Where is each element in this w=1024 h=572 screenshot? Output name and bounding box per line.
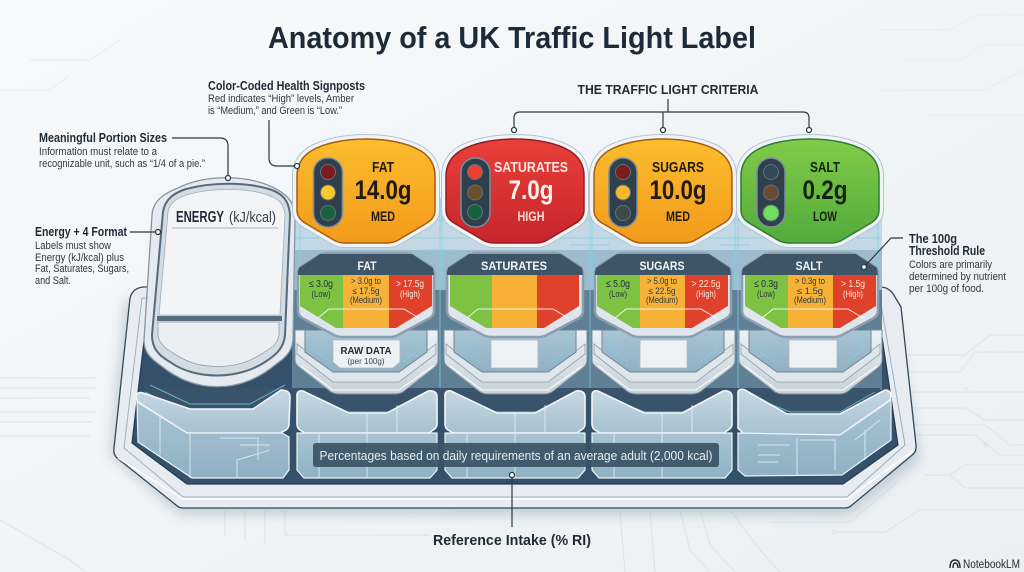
heading and bracket: the traffic light criteria bbox=[512, 82, 812, 132]
salt stack bbox=[739, 330, 882, 394]
callout: energy + 4 format: and Salt. bbox=[35, 275, 71, 287]
traffic light card: salt, low: SALT bbox=[810, 159, 840, 176]
callout: color-coded health signposts: is “Medium,” and Green is “Low.” bbox=[208, 105, 342, 117]
callout: energy + 4 format: Labels must show bbox=[35, 240, 111, 252]
raw data panel: RAW DATA bbox=[340, 345, 392, 357]
connector and label: reference intake: Reference Intake (% RI) bbox=[433, 532, 591, 549]
circuit glass backplate bbox=[292, 198, 882, 390]
nutrient reference card: fat: ≤ 3.0g bbox=[309, 279, 333, 290]
energy heading bbox=[176, 209, 276, 226]
nutrient reference card: fat: > 17.5g bbox=[396, 279, 424, 290]
traffic light card: saturates, high: SATURATES bbox=[494, 159, 568, 176]
energy heading: ENERGY bbox=[176, 209, 224, 226]
traffic light card: salt, low: LOW bbox=[813, 208, 838, 224]
nutrient reference card: sugars: ≤ 22.5g bbox=[648, 286, 676, 296]
nutrient reference card: fat: ≤ 17.5g bbox=[352, 286, 380, 296]
daily requirements banner: Percentages based on daily requirements of an average adult (2,000 kcal) bbox=[320, 448, 712, 463]
traffic light card: fat, medium: 14.0g bbox=[354, 175, 412, 205]
callout: energy + 4 format: Energy + 4 Format bbox=[35, 225, 128, 239]
sugars stack bbox=[592, 330, 735, 394]
callout: color-coded health signposts: Color-Coded Health Signposts bbox=[208, 79, 365, 93]
traffic light card: salt, low: 0.2g bbox=[802, 175, 848, 205]
lower trough circuit traces bbox=[145, 385, 880, 416]
fat stack bbox=[295, 330, 438, 394]
callout: the 100g threshold rule: Threshold Rule bbox=[909, 244, 985, 258]
traffic light card: sugars, medium: SUGARS bbox=[652, 159, 704, 176]
traffic light card: saturates, high: HIGH bbox=[518, 208, 544, 224]
callout: color-coded health signposts bbox=[208, 79, 365, 168]
nutrient reference card: sugars: (Low) bbox=[609, 289, 627, 299]
nutrient reference card: salt: ≤ 0.3g bbox=[754, 279, 778, 290]
traffic light card: fat, medium: MED bbox=[371, 208, 395, 224]
nutrient reference card: salt: (High) bbox=[843, 289, 863, 299]
traffic light card: fat, medium bbox=[297, 139, 435, 243]
callout: the 100g threshold rule: Colors are primarily bbox=[909, 259, 992, 271]
nutrient reference card: fat: > 3.0g to bbox=[351, 276, 381, 286]
traffic light card: sugars, medium: MED bbox=[666, 208, 690, 224]
nutrient reference card: salt: > 0.3g to bbox=[795, 276, 825, 286]
saturates column cell bbox=[445, 391, 585, 478]
traffic light card: sugars, medium bbox=[594, 139, 732, 243]
nutrient reference card: salt: SALT bbox=[796, 259, 823, 273]
callout: meaningful portion sizes: recognizable unit, such as “1/4 of a pie.” bbox=[39, 158, 205, 170]
callout: the 100g threshold rule bbox=[862, 232, 1006, 295]
callout: meaningful portion sizes: Meaningful Portion Sizes bbox=[39, 131, 167, 145]
traffic light card: saturates, high bbox=[446, 139, 584, 243]
raw data panel: (per 100g) bbox=[348, 356, 385, 366]
callout: the 100g threshold rule: The 100g bbox=[909, 232, 957, 246]
traffic light card: sugars, medium: 10.0g bbox=[650, 175, 706, 205]
heading and bracket: the traffic light criteria: THE TRAFFIC LIGHT CRITERIA bbox=[578, 82, 759, 97]
tray base bbox=[110, 287, 920, 515]
energy column cell bbox=[136, 390, 290, 478]
nutrient reference card: salt: ≤ 1.5g bbox=[797, 286, 823, 296]
traffic light card: salt, low bbox=[741, 139, 879, 243]
callout: the 100g threshold rule: per 100g of food. bbox=[909, 283, 984, 295]
nutrient reference card: sugars: (Medium) bbox=[646, 295, 678, 305]
salt column cell bbox=[738, 389, 891, 476]
callout: meaningful portion sizes: Information must relate to a bbox=[39, 146, 158, 158]
callout: energy + 4 format bbox=[35, 225, 160, 287]
traffic light card: saturates, high: 7.0g bbox=[508, 175, 554, 205]
nutrient reference card: salt bbox=[742, 253, 878, 337]
sugars column cell bbox=[592, 391, 732, 478]
nutrient reference card: fat bbox=[298, 253, 434, 337]
blank data panels bbox=[491, 340, 837, 368]
nutrient reference card: saturates: SATURATES bbox=[481, 259, 547, 273]
callout: energy + 4 format: Energy (kJ/kcal) plus bbox=[35, 252, 124, 264]
nutrient reference card: fat: (High) bbox=[400, 289, 420, 299]
nutrient reference card: fat: (Medium) bbox=[350, 295, 382, 305]
bottom glass cells bbox=[136, 389, 891, 478]
nutrient reference card: sugars bbox=[595, 253, 731, 337]
daily requirements banner bbox=[313, 443, 719, 467]
fat column cell bbox=[297, 391, 437, 478]
nutrient reference card: saturates bbox=[447, 253, 583, 337]
nutrient reference card: sugars: (High) bbox=[696, 289, 716, 299]
nutrient reference card: salt: (Low) bbox=[757, 289, 775, 299]
nutrient reference card: salt: (Medium) bbox=[794, 295, 826, 305]
energy heading: (kJ/kcal) bbox=[229, 209, 276, 226]
nutrient reference card: sugars: > 5.0g to bbox=[647, 276, 677, 286]
raised column stacks bbox=[295, 330, 882, 394]
nutrient reference card: sugars: ≤ 5.0g bbox=[606, 279, 630, 290]
callout: color-coded health signposts: Red indicates “High” levels, Amber bbox=[208, 93, 354, 105]
nutrient reference card: sugars: SUGARS bbox=[640, 259, 684, 273]
nutrient reference card: fat: FAT bbox=[358, 259, 377, 273]
nutrient reference card: salt: > 1.5g bbox=[841, 279, 865, 290]
callout: meaningful portion sizes bbox=[39, 131, 230, 180]
saturates stack bbox=[444, 330, 587, 394]
connector and label: reference intake bbox=[433, 472, 591, 549]
traffic light card: fat, medium: FAT bbox=[372, 159, 394, 176]
callout: the 100g threshold rule: determined by nutrient bbox=[909, 271, 1006, 283]
raw data panel bbox=[333, 340, 400, 368]
energy panel bbox=[144, 178, 295, 387]
nutrient reference card: fat: (Low) bbox=[312, 289, 330, 299]
nutrient reference card: sugars: > 22.5g bbox=[692, 279, 720, 290]
title: Anatomy of a UK Traffic Light Label bbox=[268, 20, 756, 55]
callout: energy + 4 format: Fat, Saturates, Sugars, bbox=[35, 263, 129, 275]
